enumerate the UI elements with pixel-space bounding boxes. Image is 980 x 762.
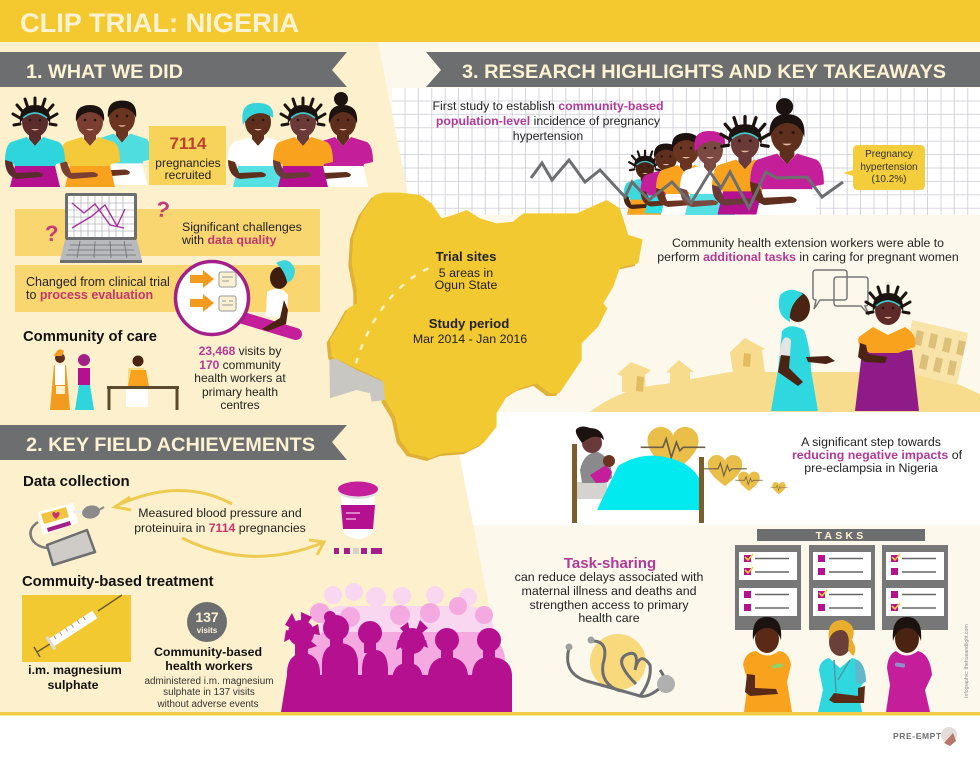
- heading: 3. research highlights: 3. RESEARCH HIGHLIGHTS AND KEY TAKEAWAYS: [462, 61, 946, 83]
- text: visits: health workers at: [194, 371, 286, 385]
- text: with data quality: with data quality: [181, 233, 276, 247]
- heading: 2. key field achievements: 2. KEY FIELD ACHIEVEMENTS: [26, 434, 315, 456]
- title bar: [0, 0, 980, 42]
- badge: 137 visits: [187, 602, 227, 642]
- stat box: 7114 pregnancies: pregnancies: [155, 156, 221, 170]
- credit: Infographic: thehueandlight.com: [964, 624, 970, 698]
- illustration: health worker talking to woman: [771, 270, 919, 411]
- panel: process evaluation: [15, 265, 320, 312]
- callout: pregnancy hypertension: hypertension: [860, 162, 918, 173]
- panel: process evaluation: Changed from clinical trial: [26, 275, 170, 289]
- arrow: to jar: [182, 538, 324, 556]
- text: i.m. magnesium: [28, 663, 122, 692]
- text: visits: [194, 344, 286, 412]
- icon: question marks: ?: [154, 196, 172, 223]
- arrow: to cuff: [115, 490, 232, 510]
- text: first study: First study to establish community-based: [433, 99, 663, 113]
- worker: magenta: [886, 617, 932, 712]
- text: trial sites: [413, 249, 527, 346]
- text: task-sharing: Task-sharing: [564, 555, 656, 572]
- stat box: 7114 pregnancies: 7114: [170, 134, 207, 153]
- text: significant step: reducing negative impacts of: [792, 448, 963, 462]
- heading: 2. key field achievements: [0, 425, 347, 460]
- text: task-sharing: maternal illness and deaths and: [522, 584, 697, 598]
- text: community-based health workers: sulphate in 137 visits: [163, 687, 255, 698]
- icon: laptop: [60, 193, 142, 263]
- text: visits: centres: [220, 398, 260, 412]
- text: significant step: pre-eclampsia in Nigeria: [804, 461, 938, 475]
- icon: blood pressure cuff: [30, 503, 104, 565]
- illustration: crowd silhouettes: [281, 583, 512, 712]
- illustration: village background: [590, 320, 980, 412]
- illustration: women with trend line: [531, 98, 843, 215]
- stat box: 7114 pregnancies: recruited: [165, 168, 211, 182]
- text: task-sharing: health care: [578, 611, 640, 625]
- text: trial sites: Study period: [429, 316, 509, 331]
- text: significant step: A significant step towards: [801, 435, 941, 449]
- text: i.m. magnesium: sulphate: [48, 678, 99, 692]
- text: community-based health workers: health workers: [165, 659, 253, 673]
- text: community-based health workers: administered i.m. magnesium: [145, 676, 273, 687]
- heading: community-based treatment: Commuity-based treatment: [22, 574, 214, 590]
- badge: 137 visits: 137: [195, 609, 219, 625]
- text: community health extension workers: perform additional tasks in caring for pregnant women: [657, 250, 959, 264]
- heading: 3. research highlights: [426, 52, 980, 87]
- logo: PRE-EMPT: PRE-EMPT: [893, 731, 942, 741]
- text: i.m. magnesium: i.m. magnesium: [28, 663, 122, 677]
- text: visits: primary health: [202, 385, 278, 399]
- text: visits: 23,468 visits by: [199, 344, 281, 358]
- text: significant step: [792, 435, 963, 475]
- text: community-based health workers: without adverse events: [156, 699, 259, 710]
- callout: pregnancy hypertension: (10.2%): [871, 174, 907, 185]
- callout: pregnancy hypertension: Pregnancy: [865, 149, 913, 160]
- panel: magnesium sulphate syringe: [22, 595, 131, 692]
- callout: pregnancy hypertension: [843, 145, 925, 190]
- worker: orange: [743, 617, 792, 712]
- text: measured: proteinuira in 7114 pregnancies: [134, 521, 306, 535]
- text: first study: population-level incidence of pregnancy: [436, 114, 661, 128]
- tasks board: TASKS: [816, 530, 866, 542]
- icon: stethoscope: [566, 634, 675, 696]
- stat box: 7114 pregnancies: [149, 126, 226, 185]
- panel: data quality: [15, 193, 320, 263]
- text: trial sites: Ogun State: [435, 278, 497, 292]
- illustration: mother in bed with hearts: [572, 426, 788, 523]
- text: community health extension workers: Community health extension workers were able to: [672, 236, 944, 250]
- worker: cyan: [818, 620, 866, 712]
- text: first study: hypertension: [513, 129, 583, 143]
- panel: process evaluation: to process evaluation: [26, 288, 153, 302]
- text: community health extension workers: [657, 236, 959, 264]
- text: community-based health workers: Community-based: [154, 645, 262, 659]
- text: trial sites: Trial sites: [436, 249, 496, 264]
- heading: 1. what we did: 1. WHAT WE DID: [26, 61, 183, 83]
- text: task-sharing: can reduce delays associated with: [515, 570, 703, 584]
- illustration: three health workers: [743, 617, 932, 712]
- text: trial sites: Mar 2014 - Jan 2016: [413, 332, 527, 346]
- group of women, left: [5, 98, 152, 187]
- group of women, right: [228, 92, 373, 187]
- title bar: CLIP TRIAL: NIGERIA: [20, 8, 299, 38]
- badge: 137 visits: visits: [197, 626, 218, 635]
- icon: magnifying glass with worker: [176, 260, 296, 334]
- tasks board: [735, 529, 948, 630]
- heading: data collection: Data collection: [23, 473, 130, 490]
- heading: 1. what we did: [0, 52, 347, 87]
- heading: community of care: Community of care: [23, 329, 157, 345]
- icon: community of care people: [50, 349, 179, 410]
- icon: question marks: [45, 196, 172, 246]
- text: community-based health workers: [145, 645, 273, 710]
- text: first study: [433, 99, 663, 143]
- map of Nigeria: [327, 193, 643, 461]
- text: trial sites: 5 areas in: [439, 266, 493, 280]
- text: visits: 170 community: [199, 358, 281, 372]
- icon: question marks: ?: [45, 221, 58, 246]
- text: task-sharing: [515, 555, 703, 625]
- text: data quality: Significant challenges: [182, 220, 302, 234]
- text: measured: [134, 506, 306, 535]
- text: measured: Measured blood pressure and: [138, 506, 302, 520]
- logo: PRE-EMPT: [893, 727, 957, 746]
- icon: urine sample jar: [334, 482, 382, 554]
- text: task-sharing: strengthen access to primary: [529, 598, 689, 612]
